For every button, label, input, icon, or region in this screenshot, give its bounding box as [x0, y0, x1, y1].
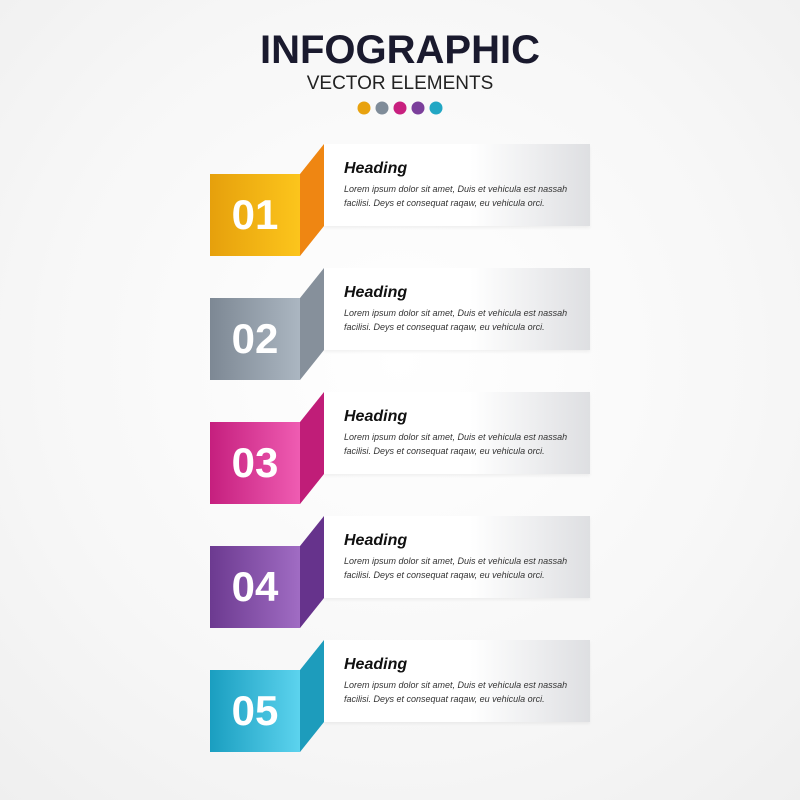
heading: Heading — [344, 656, 407, 673]
number box — [210, 298, 300, 380]
body text: facilisi. Deys et consequat raqaw, eu vehicula orci. — [344, 570, 545, 580]
step 01 — [210, 144, 590, 256]
text panel — [324, 516, 590, 598]
body text: Lorem ipsum dolor sit amet, Duis et vehicula est nassah — [344, 184, 567, 194]
number box — [210, 670, 300, 752]
text panel — [324, 640, 590, 722]
text panel — [324, 392, 590, 474]
step 02 — [210, 268, 590, 380]
step 04 — [210, 516, 590, 628]
color dots — [358, 102, 442, 114]
number box: 04 — [232, 563, 278, 610]
body text: facilisi. Deys et consequat raqaw, eu vehicula orci. — [344, 446, 545, 456]
subtitle: VECTOR ELEMENTS — [307, 73, 493, 94]
body text: Lorem ipsum dolor sit amet, Duis et vehicula est nassah — [344, 308, 567, 318]
number box: 02 — [232, 315, 278, 362]
number box — [210, 422, 300, 504]
body text: Lorem ipsum dolor sit amet, Duis et vehicula est nassah — [344, 556, 567, 566]
side face — [300, 640, 324, 752]
heading: Heading — [344, 408, 407, 425]
side face — [300, 144, 324, 256]
body text — [344, 308, 567, 332]
body text: Lorem ipsum dolor sit amet, Duis et vehicula est nassah — [344, 432, 567, 442]
side face — [300, 516, 324, 628]
body text — [344, 184, 567, 208]
side face — [300, 392, 324, 504]
body text: Lorem ipsum dolor sit amet, Duis et vehicula est nassah — [344, 680, 567, 690]
number box: 01 — [232, 191, 278, 238]
step 05 — [210, 640, 590, 752]
body text — [344, 432, 567, 456]
number box — [210, 174, 300, 256]
body text — [344, 680, 567, 704]
step 03 — [210, 392, 590, 504]
number box: 03 — [232, 439, 278, 486]
body text: facilisi. Deys et consequat raqaw, eu vehicula orci. — [344, 694, 545, 704]
heading: Heading — [344, 284, 407, 301]
number box — [210, 546, 300, 628]
body text: facilisi. Deys et consequat raqaw, eu vehicula orci. — [344, 322, 545, 332]
text panel — [324, 144, 590, 226]
body text: facilisi. Deys et consequat raqaw, eu vehicula orci. — [344, 198, 545, 208]
body text — [344, 556, 567, 580]
text panel — [324, 268, 590, 350]
heading: Heading — [344, 160, 407, 177]
side face — [300, 268, 324, 380]
heading: Heading — [344, 532, 407, 549]
number box: 05 — [232, 687, 278, 734]
title: INFOGRAPHIC — [260, 28, 540, 72]
